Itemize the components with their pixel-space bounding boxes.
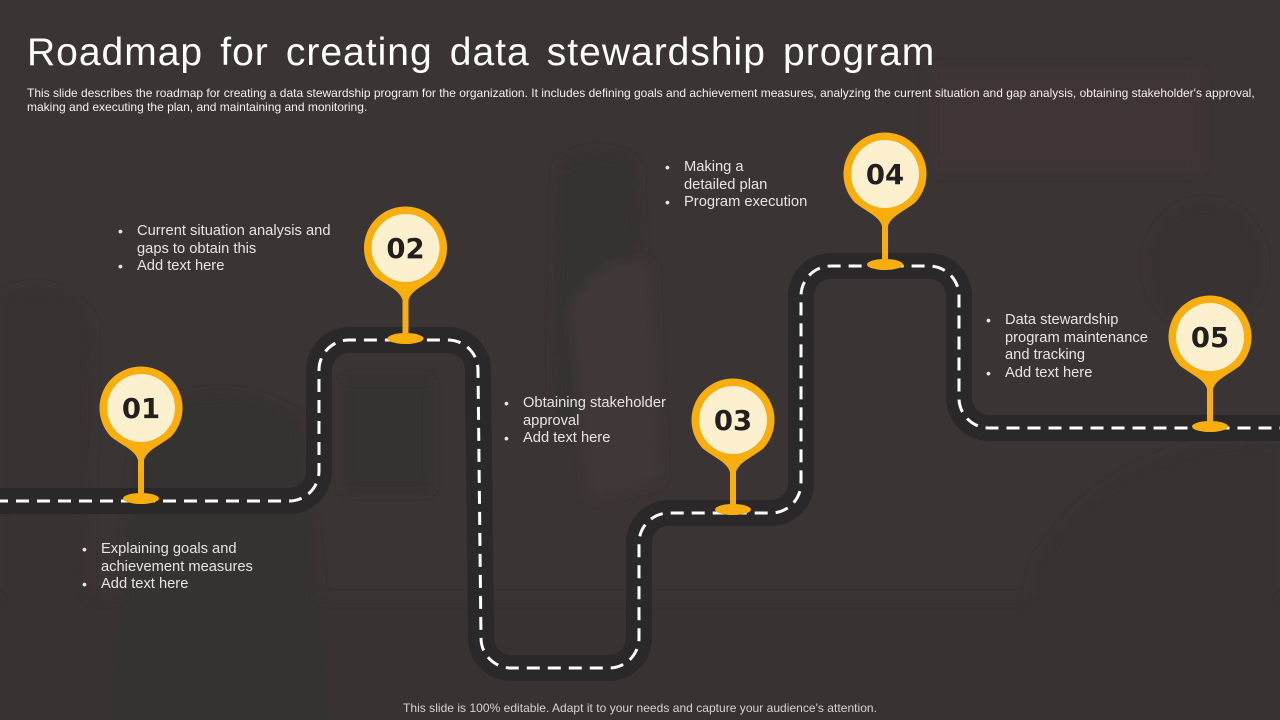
text block: step 3: approval [523,413,579,429]
text block: step 3: Obtaining stakeholder [523,395,666,411]
text block: step 1: Explaining goals and [101,541,237,557]
pin 01: 01 [122,393,160,425]
footer note: This slide is 100% editable. Adapt it to your needs and capture your audience's attention. [403,701,877,715]
description: This slide describes the roadmap for creating a data stewardship program for the organization. It includes defining goals and achievement measures, analyzing the current situation and gap analysis, obtaining stakeholder's approval, [27,86,1255,100]
pin 02 [364,206,447,344]
text block: step 5: program maintenance [1005,330,1148,346]
description: making and executing the plan, and maintaining and monitoring. [27,100,367,114]
text block: step 1 [82,541,253,592]
text block: step 5: and tracking [1005,347,1085,363]
pin 03 [691,378,775,515]
text block: step 4: detailed plan [684,177,767,193]
pin 03: 03 [714,405,752,437]
text block: step 2: Current situation analysis and [137,223,330,239]
road [0,266,1280,668]
text block: step 5: Data stewardship [1005,312,1118,328]
pin 01 [99,366,183,504]
text block: step 5 [986,312,1148,381]
text block: step 2 [118,223,330,274]
text block: step 2: Add text here [137,258,224,274]
pin 05: 05 [1191,322,1229,354]
text block: step 5: Add text here [1005,365,1092,381]
text block: step 4 [666,159,807,210]
text block: step 4: Program execution [684,194,807,210]
text block: step 2: gaps to obtain this [137,241,256,257]
text block: step 1: achievement measures [101,559,253,575]
text block: step 3 [504,395,666,446]
text block: step 4: Making a [684,159,744,175]
pin 02: 02 [386,233,425,265]
pin 04 [843,132,927,270]
title: Roadmap for creating data stewardship program [27,30,935,74]
pin 05 [1168,296,1252,432]
description [27,86,1255,114]
text block: step 1: Add text here [101,576,188,592]
pin 04: 04 [866,159,904,191]
text block: step 3: Add text here [523,430,610,446]
